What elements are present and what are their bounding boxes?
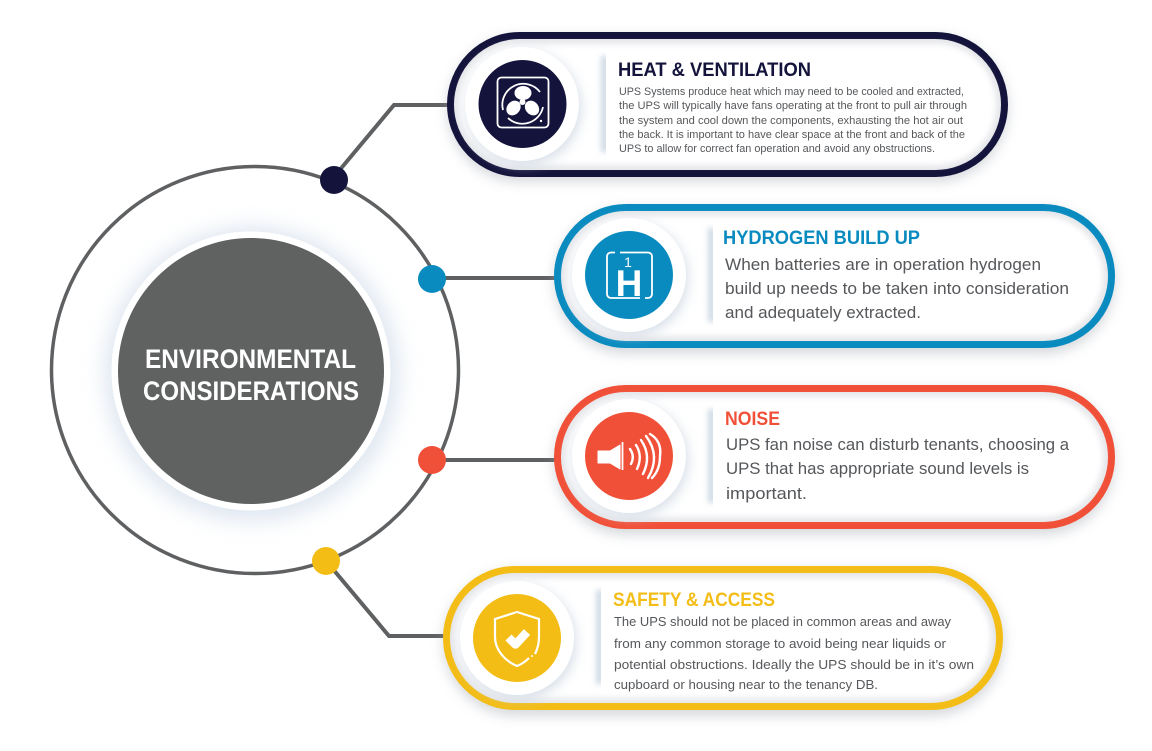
dot: hydrogen [418, 265, 446, 293]
text: hydrogen: and adequately extracted. [725, 303, 921, 322]
text: safety: cupboard or housing near to the tenancy DB. [614, 677, 878, 692]
connector: safety [332, 568, 446, 636]
dot: safety [312, 547, 340, 575]
text: heat: the UPS will typically have fans operating at the front to pull air through [619, 100, 967, 112]
text: heat: the back. It is important to have clear space at the front and back of the [619, 129, 965, 141]
centre title [143, 344, 359, 406]
panel: noise [554, 388, 1115, 535]
heading: safety: SAFETY & ACCESS [613, 590, 775, 611]
connector: heat [338, 105, 450, 172]
icon: hydrogen element [585, 231, 673, 319]
panel: hydrogen build up [554, 208, 1115, 354]
panel: safety and access [443, 570, 1004, 716]
text: safety: The UPS should not be placed in common areas and away [614, 614, 951, 629]
centre title: ENVIRONMENTAL [145, 344, 356, 374]
icon: fan [478, 60, 566, 148]
dot: noise [418, 446, 446, 474]
text: heat: UPS Systems produce heat which may need to be cooled and extracted, [619, 86, 964, 98]
heading: hydrogen: HYDROGEN BUILD UP [723, 228, 920, 249]
text: safety: from any common storage to avoid being near liquids or [614, 636, 947, 651]
text: hydrogen: build up needs to be taken into consideration [725, 279, 1069, 298]
panel: heat and ventilation [447, 36, 1008, 182]
outer ring [52, 166, 458, 574]
connector: noise [440, 458, 558, 462]
dot: heat [320, 166, 348, 194]
text: noise: important. [726, 484, 807, 503]
text: heat [619, 86, 967, 155]
text: noise: UPS that has appropriate sound levels is [726, 459, 1029, 478]
icon: hydrogen element: H [616, 263, 642, 304]
icon: speaker with sound waves [585, 412, 673, 500]
icon: hydrogen element: 1 [624, 254, 632, 270]
centre circle [105, 227, 399, 521]
text: noise [726, 435, 1070, 503]
text: safety [614, 614, 974, 692]
connector: hydrogen [440, 276, 558, 280]
text: hydrogen: When batteries are in operation hydrogen [725, 255, 1041, 274]
text: hydrogen [725, 255, 1069, 322]
text: heat: the system and cool down the components, exhausting the hot air out [619, 115, 963, 127]
heading: noise: NOISE [725, 409, 780, 430]
text: noise: UPS fan noise can disturb tenants, choosing a [726, 435, 1070, 454]
centre title: CONSIDERATIONS [143, 376, 359, 406]
icon: shield with check [473, 594, 561, 682]
text: safety: potential obstructions. Ideally the UPS should be in it’s own [614, 657, 974, 672]
heading: heat: HEAT & VENTILATION [618, 60, 811, 81]
text: heat: UPS to allow for correct fan operation and avoid any obstructions. [619, 143, 935, 155]
